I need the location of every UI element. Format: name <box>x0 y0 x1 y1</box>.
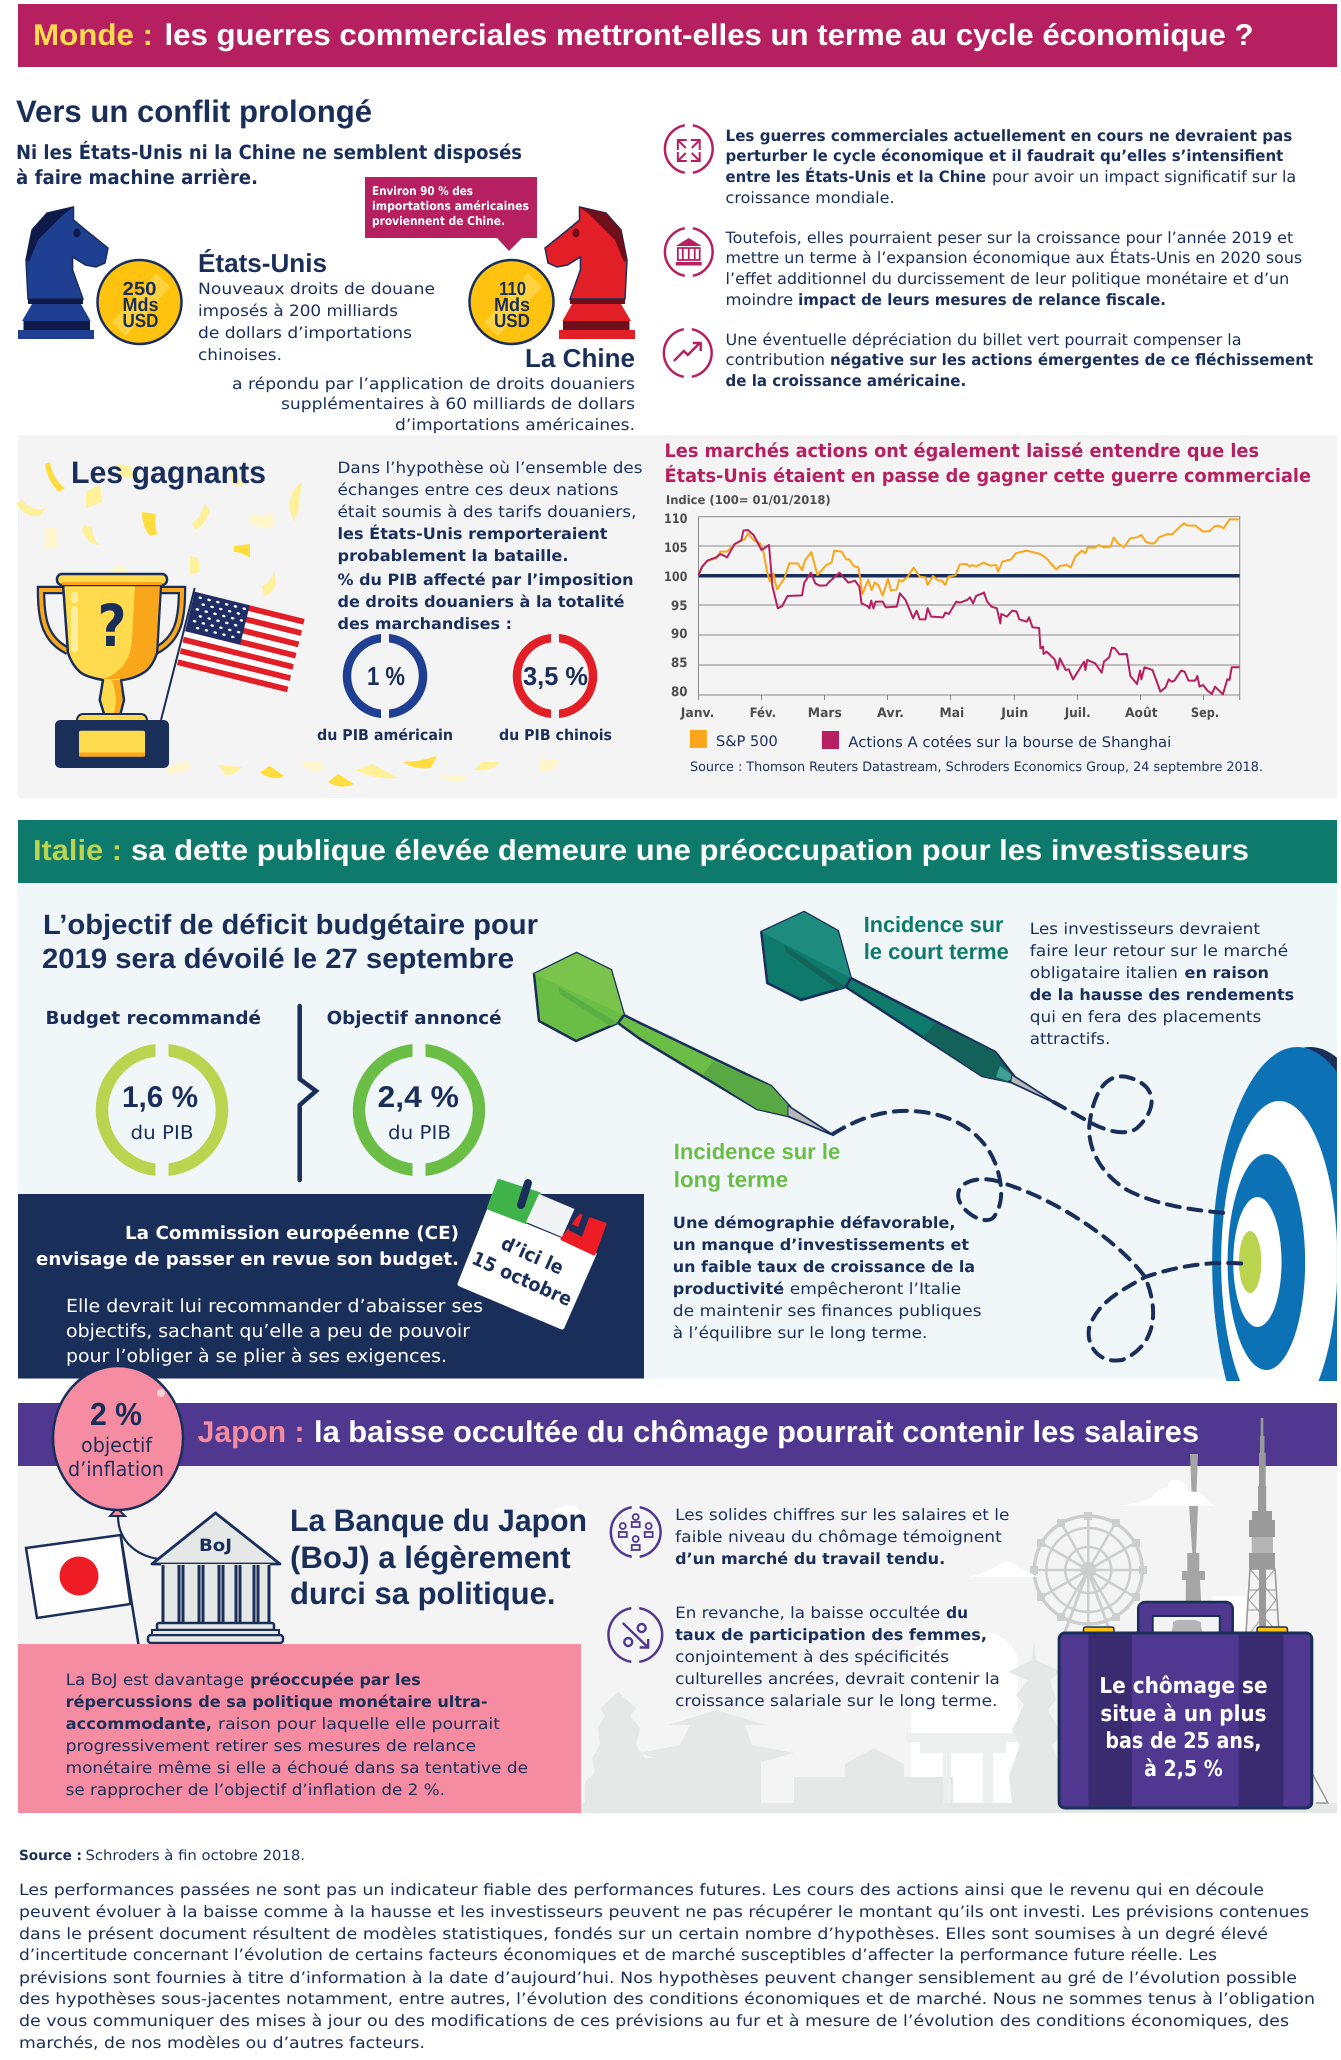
icon: suitcase with unemployment text: à 2,5 % <box>1144 1757 1223 1782</box>
icon: coin 250 Mds USD: Mds <box>122 295 158 316</box>
icon: red chess knight <box>545 207 635 339</box>
ring: budget recommandé 1,6 %: Budget recommandé <box>46 1008 261 1029</box>
text block: hypothèse: % du PIB affecté par l’imposition <box>338 571 634 589</box>
line chart: S&P 500 vs Shanghai: 80 <box>671 685 688 700</box>
line chart: S&P 500 vs Shanghai: Indice (100= 01/01/2018) <box>666 493 831 507</box>
ring: objectif annoncé 2,4 % <box>327 1008 502 1178</box>
icon: suitcase with unemployment text <box>1059 1602 1312 1808</box>
panel: BoJ pink box: La BoJ est davantage <box>66 1671 244 1689</box>
icon: balloon 2 % objectif d'inflation <box>53 1366 183 1559</box>
panel: Commission européenne: Elle devrait lui recommander d’abaisser ses <box>66 1296 483 1317</box>
text block: dépréciation du billet vert <box>726 331 1314 390</box>
header: Monde: les guerres commerciales mettront-elles un terme au cycle économique ? <box>164 19 1254 52</box>
icon: suitcase with unemployment text: Le chômage se <box>1099 1674 1268 1699</box>
heading: les gagnants: Les gagnants <box>71 455 266 490</box>
line chart: S&P 500 vs Shanghai: Sep. <box>1191 706 1219 721</box>
text block: hypothèse: était soumis à des tarifs douaniers, <box>338 503 636 521</box>
chart legend <box>690 730 1171 751</box>
ring: 3,5 % du PIB chinois: 3,5 % <box>523 661 588 691</box>
callout: 90 % des importations: proviennent de Chine. <box>372 214 505 228</box>
text block: États-Unis: États-Unis <box>198 248 327 278</box>
panel: Commission européenne: objectifs, sachant qu’elle a peu de pouvoir <box>66 1321 471 1342</box>
text block: Toutefois: moindre <box>726 291 793 309</box>
text block: La Chine: supplémentaires à 60 milliards de dollars <box>281 395 635 413</box>
ring: objectif annoncé 2,4 %: Objectif annoncé <box>327 1008 502 1029</box>
heading: Banque du Japon: (BoJ) a légèrement <box>290 1540 571 1575</box>
text block: Toutefois: mettre un terme à l’expansion économique aux États-Unis en 2020 sous <box>726 248 1302 267</box>
text block: court terme: qui en fera des placements <box>1030 1008 1261 1026</box>
text block: guerres commerciales: pour avoir un impact significatif sur la <box>992 168 1296 186</box>
footer: source: Schroders à fin octobre 2018. <box>86 1848 305 1864</box>
header: Japon <box>18 1403 1337 1466</box>
footer: disclaimer: d’incertitude concernant l’évolution de certains facteurs économiques et de marché susceptibles d’affecter la performance future réelle. Les <box>19 1946 1217 1964</box>
panel: BoJ pink box <box>18 1644 581 1813</box>
icon: trophy <box>41 574 182 768</box>
panel: Commission européenne: pour l’obliger à se plier à ses exigences. <box>66 1346 447 1367</box>
footer: disclaimer: prévisions sont fournies à titre d’information à la date d’aujourd’hui. Nos hypothèses peuvent changer sensiblement au gré de l’évolution possible <box>19 1969 1297 1987</box>
text block: guerres commerciales <box>726 127 1296 207</box>
text block: long terme: de maintenir ses finances publiques <box>673 1302 982 1320</box>
text block: taux de participation: conjointement à des spécificités <box>675 1648 949 1666</box>
text block: États-Unis: imposés à 200 milliards <box>198 302 398 320</box>
icon: coin 110 Mds USD <box>470 260 554 344</box>
line chart: S&P 500 vs Shanghai: Juin <box>1000 706 1028 721</box>
icon: coin 110 Mds USD: Mds <box>494 295 530 316</box>
text block: États-Unis: de dollars d’importations <box>198 324 412 342</box>
chart legend: Actions A cotées sur la bourse de Shanghai <box>848 735 1171 751</box>
icon: rising chart line <box>664 326 712 380</box>
line chart: S&P 500 vs Shanghai: 110 <box>664 512 688 527</box>
header: Monde <box>18 4 1337 67</box>
ring: objectif annoncé 2,4 %: 2,4 % <box>378 1081 459 1114</box>
text block: court terme: attractifs. <box>1030 1030 1110 1048</box>
line chart: S&P 500 vs Shanghai: Juil. <box>1064 706 1091 721</box>
subheading: à faire machine arrière. <box>16 166 258 189</box>
icon: BoJ building <box>148 1513 283 1643</box>
text block: guerres commerciales: entre les États-Unis et la Chine <box>726 167 986 186</box>
illustration: Tokyo Tower <box>1246 1418 1279 1633</box>
panel: Japon <box>18 1366 1337 1813</box>
text block: marché du travail <box>675 1506 1009 1568</box>
line chart: S&P 500 vs Shanghai: 85 <box>671 656 688 671</box>
line chart: S&P 500 vs Shanghai: Mars <box>808 706 842 721</box>
text block: guerres commerciales: perturber le cycle économique et il faudrait qu’elles s’intensifient <box>726 147 1284 165</box>
line chart: S&P 500 vs Shanghai: Août <box>1125 706 1158 721</box>
ring: budget recommandé 1,6 %: 1,6 % <box>122 1081 198 1114</box>
icon: coin 250 Mds USD: USD <box>122 311 158 332</box>
icon: BoJ building: BoJ <box>199 1536 232 1556</box>
text block: marché du travail: Les solides chiffres sur les salaires et le <box>675 1506 1009 1524</box>
icon: suitcase with unemployment text: situe à un plus <box>1100 1702 1267 1727</box>
text block: guerres commerciales: Les guerres commerciales actuellement en cours ne devraient pas <box>726 127 1292 145</box>
text block: États-Unis: Nouveaux droits de douane <box>198 280 435 298</box>
text block: court terme: Les investisseurs devraient <box>1030 920 1260 938</box>
icon: Japanese flag <box>26 1535 138 1644</box>
ring: 3,5 % du PIB chinois: du PIB chinois <box>499 726 612 744</box>
text block: Toutefois <box>725 229 1302 309</box>
text block: court terme: le court terme <box>864 939 1009 964</box>
footer: disclaimer: Les performances passées ne sont pas un indicateur fiable des performances futures. Les cours des actions ainsi que le revenu qui en découle <box>19 1881 1264 1899</box>
text block: long terme: long terme <box>674 1167 788 1192</box>
text block: long terme: empêcheront l’Italie <box>790 1280 961 1298</box>
text block: dépréciation du billet vert: de la croissance américaine. <box>726 372 966 390</box>
panel: BoJ pink box: progressivement retirer ses mesures de relance <box>66 1737 476 1755</box>
text block: États-Unis <box>198 248 435 364</box>
chart source: Source : Thomson Reuters Datastream, Schroders Economics Group, 24 septembre 2018. <box>690 760 1263 775</box>
text block: hypothèse: échanges entre ces deux nations <box>338 481 618 499</box>
ring: objectif annoncé 2,4 %: du PIB <box>388 1122 451 1144</box>
text block: Toutefois: l’effet additionnel du durcissement de leur politique monétaire et d’un <box>726 270 1289 288</box>
subheading: Ni les États-Unis ni la Chine ne semblent disposés <box>16 140 522 164</box>
icon: blue chess knight <box>18 207 108 339</box>
icon: expanding arrows <box>665 122 713 176</box>
panel: BoJ pink box: monétaire même si elle a échoué dans sa tentative de <box>66 1759 528 1777</box>
footer: disclaimer: des hypothèses sous-jacentes notamment, entre autres, l’évolution des conditions économiques et de marché. Nous ne sommes tenus à l’obligation <box>19 1990 1315 2008</box>
footer: source: Source : <box>19 1848 82 1864</box>
icon: coin 110 Mds USD: 110 <box>499 279 526 300</box>
confetti <box>16 462 559 787</box>
panel: Italie <box>18 820 1337 1381</box>
line chart: S&P 500 vs Shanghai: 95 <box>671 599 688 614</box>
text block: hypothèse <box>338 459 642 633</box>
text block: La Chine: a répondu par l’application de droits douaniers <box>232 375 635 393</box>
text block: hypothèse: Dans l’hypothèse où l’ensemble des <box>338 459 642 477</box>
icon: target <box>1212 1047 1337 1381</box>
panel: Commission européenne: La Commission européenne (CE) <box>125 1223 459 1244</box>
text block: marché du travail: d’un marché du travail tendu. <box>675 1550 945 1568</box>
line chart: S&P 500 vs Shanghai: 105 <box>664 541 688 556</box>
footer: disclaimer <box>19 1881 1315 2052</box>
icon: green dart <box>534 953 831 1134</box>
text block: taux de participation: du <box>946 1604 968 1622</box>
text block: dépréciation du billet vert: Une éventuelle dépréciation du billet vert pourrait compenser la <box>726 331 1242 349</box>
chart legend: S&P 500 <box>716 734 778 750</box>
header: Monde: Monde : <box>33 19 153 52</box>
callout: 90 % des importations: Environ 90 % des <box>372 184 473 198</box>
icon: calendar 15 octobre: d’ici le <box>498 1232 567 1279</box>
ring: budget recommandé 1,6 % <box>46 1008 261 1178</box>
panel: les gagnants et marchés actions <box>16 435 1337 798</box>
heading: objectif de déficit <box>42 909 538 974</box>
icon: coin 110 Mds USD: USD <box>494 311 530 332</box>
text block: long terme: un manque d’investissements et <box>673 1236 970 1254</box>
icon: calendar 15 octobre <box>460 1181 605 1327</box>
icon: trophy: ? <box>98 592 126 660</box>
text block: long terme: productivité <box>673 1280 784 1298</box>
text block: court terme: Incidence sur <box>864 912 1004 937</box>
ring: 1 % du PIB américain <box>317 632 453 744</box>
subheading <box>16 140 522 189</box>
footer: disclaimer: peuvent évoluer à la baisse comme à la hausse et les investisseurs peuvent ne pas récupérer le montant qu’ils ont investi. Les prévisions contenues <box>19 1903 1309 1921</box>
line chart: S&P 500 vs Shanghai: Avr. <box>877 706 904 721</box>
callout: 90 % des importations <box>365 177 537 251</box>
text block: taux de participation: En revanche, la baisse occultée <box>675 1604 940 1622</box>
illustration: cloud <box>1120 1480 1215 1506</box>
header: Japon: Japon : <box>198 1416 304 1449</box>
line chart: S&P 500 vs Shanghai: Janv. <box>680 706 714 721</box>
icon: balloon 2 % objectif d'inflation: objectif <box>81 1433 153 1457</box>
text block: court terme: obligataire italien <box>1030 964 1178 982</box>
footer: disclaimer: de vous communiquer des mises à jour ou des modifications de ces prévisions au fur et à mesure de l’évolution des conditions économiques, des <box>19 2012 1289 2030</box>
text block: États-Unis: chinoises. <box>198 346 282 364</box>
illustration: Tokyo Skytree <box>1182 1454 1205 1640</box>
text block: dépréciation du billet vert: contribution <box>726 351 825 369</box>
panel: Commission européenne: envisage de passer en revue son budget. <box>36 1249 459 1270</box>
line chart: S&P 500 vs Shanghai: 100 <box>664 570 688 585</box>
header: Japon: la baisse occultée du chômage pourrait contenir les salaires <box>314 1416 1199 1449</box>
right side: labour market points and suitcase <box>608 1504 1312 1808</box>
heading: marchés actions: États-Unis étaient en passe de gagner cette guerre commerciale <box>664 464 1311 487</box>
heading: Banque du Japon: durci sa politique. <box>290 1576 556 1611</box>
text block: long terme: Une démographie défavorable, <box>673 1214 956 1232</box>
text block: Toutefois: Toutefois, elles pourraient peser sur la croissance pour l’année 2019 et <box>725 229 1293 247</box>
text block: taux de participation: croissance salariale sur le long terme. <box>675 1692 997 1710</box>
icon: calendar 15 octobre: 15 octobre <box>468 1247 575 1311</box>
text block: La Chine: d’importations américaines. <box>395 416 635 434</box>
divider arrow <box>300 1006 316 1180</box>
text block: Toutefois: impact de leurs mesures de relance fiscale. <box>798 291 1166 309</box>
text block: dépréciation du billet vert: négative sur les actions émergentes de ce fléchissement <box>830 351 1314 369</box>
text block: guerres commerciales: croissance mondiale. <box>726 189 895 207</box>
panel: BoJ pink box: se rapprocher de l’objectif d’inflation de 2 %. <box>66 1781 445 1799</box>
header: Italie: Italie : <box>33 835 122 867</box>
icon: American flag <box>161 588 305 720</box>
arrow: green dart path <box>833 1111 1247 1361</box>
text block: hypothèse: de droits douaniers à la totalité <box>338 593 624 611</box>
text block: court terme: en raison <box>1185 964 1269 982</box>
ring: 1 % du PIB américain: 1 % <box>367 661 405 691</box>
panel: BoJ pink box: préoccupée par les <box>250 1671 421 1689</box>
icon: teal dart <box>761 912 1054 1102</box>
callout: 90 % des importations: importations américaines <box>372 199 529 213</box>
text block: taux de participation <box>675 1604 1000 1710</box>
text block: long terme: Incidence sur le <box>674 1139 840 1164</box>
icon: balloon 2 % objectif d'inflation: 2 % <box>90 1396 142 1432</box>
text block: court terme: de la hausse des rendements <box>1030 986 1294 1004</box>
line chart: S&P 500 vs Shanghai: 90 <box>671 627 688 642</box>
line chart: S&P 500 vs Shanghai <box>664 493 1240 721</box>
text block: hypothèse: probablement la bataille. <box>338 547 568 565</box>
heading: objectif de déficit: L’objectif de déficit budgétaire pour <box>43 909 538 940</box>
right column: key points <box>664 122 1314 390</box>
text block: long terme: à l’équilibre sur le long terme. <box>673 1324 927 1342</box>
icon: coin 250 Mds USD: 250 <box>122 279 156 300</box>
text block: long terme: un faible taux de croissance de la <box>673 1258 975 1276</box>
icon: percent down <box>608 1605 662 1665</box>
heading: objectif de déficit: 2019 sera dévoilé le 27 septembre <box>42 943 514 974</box>
header: Italie: sa dette publique élevée demeure une préoccupation pour les investisseurs <box>131 835 1249 867</box>
text block: court terme <box>864 912 1294 1048</box>
text block: marché du travail: faible niveau du chômage témoignent <box>675 1528 1002 1546</box>
footer: disclaimer: dans le présent document résultent de modèles statistiques, fondés sur un certain nombre d’hypothèses. Elles sont soumises à un degré élevé <box>19 1925 1268 1943</box>
icon: coin 250 Mds USD <box>98 260 182 344</box>
ring: budget recommandé 1,6 %: du PIB <box>130 1122 194 1144</box>
text block: long terme <box>673 1139 982 1342</box>
panel: Commission européenne <box>18 1194 644 1378</box>
text block: hypothèse: les États-Unis remporteraient <box>338 524 608 543</box>
heading: marchés actions <box>664 441 1311 487</box>
icon: balloon 2 % objectif d'inflation: d’inflation <box>68 1457 164 1481</box>
icon: bank <box>665 225 713 279</box>
footer: disclaimer: marchés, de nos modèles ou d’autres facteurs. <box>19 2034 425 2052</box>
arrow: teal dart path <box>1054 1076 1226 1213</box>
panel: BoJ pink box: répercussions de sa politique monétaire ultra- <box>66 1693 487 1711</box>
line chart: S&P 500 vs Shanghai: Fév. <box>750 706 776 721</box>
ring: 1 % du PIB américain: du PIB américain <box>317 726 453 744</box>
panel: BoJ pink box: raison pour laquelle elle pourrait <box>218 1715 500 1733</box>
text block: La Chine: La Chine <box>525 343 635 373</box>
icon: people network <box>611 1504 661 1560</box>
heading: marchés actions: Les marchés actions ont également laissé entendre que les <box>664 441 1259 462</box>
heading: vers un conflit prolongé: Vers un conflit prolongé <box>16 94 372 129</box>
panel: BoJ pink box: accommodante, <box>66 1715 212 1733</box>
text block: taux de participation: culturelles ancrées, devrait contenir la <box>675 1670 1000 1688</box>
illustration: skyline <box>555 1506 1337 1813</box>
ring: 3,5 % du PIB chinois <box>499 632 612 744</box>
line chart: S&P 500 vs Shanghai: Mai <box>940 706 964 721</box>
text block: La Chine <box>232 343 635 434</box>
header: Italie <box>18 820 1337 883</box>
text block: taux de participation: taux de participation des femmes, <box>675 1626 987 1644</box>
right side: darts, target and paths <box>674 910 1337 1381</box>
heading: Banque du Japon <box>290 1503 587 1611</box>
icon: suitcase with unemployment text: bas de 25 ans, <box>1105 1729 1262 1754</box>
text block: court terme: faire leur retour sur le marché <box>1030 942 1288 960</box>
text block: hypothèse: des marchandises : <box>338 615 512 633</box>
heading: Banque du Japon: La Banque du Japon <box>290 1503 587 1538</box>
